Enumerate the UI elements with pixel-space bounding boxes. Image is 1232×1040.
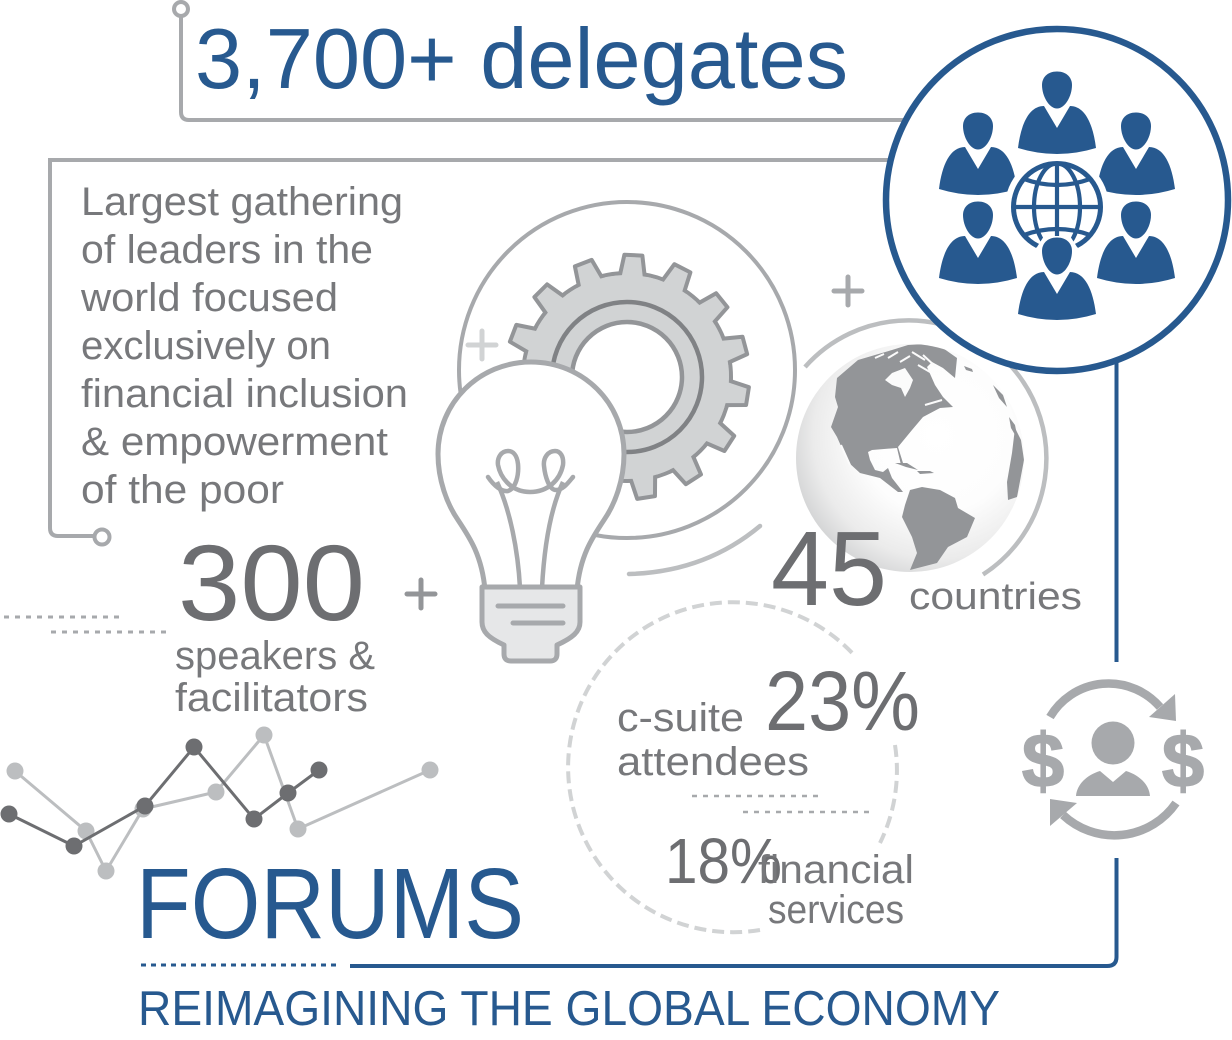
stat: c-suite 23%: c-suite (617, 696, 744, 740)
stat: financial services 18%: services (768, 888, 904, 932)
connector: description frame (50, 160, 900, 544)
stat: financial services 18%: 18% (665, 825, 782, 897)
connector: blue right and bottom line (350, 360, 1116, 966)
text block: description: Largest gathering (81, 180, 403, 224)
stat: c-suite 23%: 23% (765, 654, 920, 748)
Hudson Bay (885, 368, 913, 397)
text block: description: of leaders in the (81, 228, 373, 272)
stat: 300 speakers: facilitators (175, 676, 368, 720)
arc around globe (805, 320, 1046, 574)
dotted rules left (4, 617, 167, 632)
icon: light bulb (438, 362, 624, 661)
plus sign near globe (834, 277, 862, 305)
stat: 300 speakers: 300 (178, 522, 365, 643)
icon: globe with continents (796, 344, 1024, 572)
title: delegates: 3,700+ delegates (195, 12, 848, 107)
icon: person with dollars and arrows: $ (1022, 719, 1064, 804)
text block: description: financial inclusion (81, 372, 408, 416)
outline circle behind gear (459, 202, 795, 538)
dotted rules right (692, 796, 869, 812)
arctic and coastal details (841, 352, 942, 465)
text block: description: exclusively on (81, 324, 331, 368)
stat: 45 countries: 45 (771, 510, 887, 628)
subheading: reimagining the global economy: REIMAGINING THE GLOBAL ECONOMY (138, 982, 1000, 1036)
stat: c-suite 23%: attendees (617, 740, 809, 784)
stat: c-suite 23% (617, 654, 920, 784)
plus sign next to 300 (407, 580, 435, 608)
stat: 45 countries (771, 510, 1082, 628)
arc below gear (629, 526, 760, 574)
icon: person with dollars and arrows (1022, 684, 1204, 835)
text block: description: world focused (80, 276, 338, 320)
text block: description (80, 180, 408, 512)
text block: description: & empowerment (81, 420, 388, 464)
text block: description: of the poor (81, 468, 284, 512)
icon: delegates around globe in blue circle (886, 29, 1228, 371)
stat: 45 countries: countries (909, 576, 1082, 618)
dashed circle (568, 602, 897, 932)
icon: gear (504, 254, 750, 500)
line chart (0, 726, 438, 880)
stat: 300 speakers (175, 522, 375, 720)
icon: person with dollars and arrows: $ (1162, 719, 1204, 804)
stat: 300 speakers: speakers & (175, 634, 375, 678)
stat: financial services 18% (665, 825, 914, 932)
connector: delegates frame (174, 2, 920, 120)
dotted blue rule (141, 964, 338, 966)
stat: financial services 18%: financial (758, 848, 914, 892)
plus sign near gear (468, 331, 496, 359)
heading: forums: FORUMS (136, 848, 524, 960)
